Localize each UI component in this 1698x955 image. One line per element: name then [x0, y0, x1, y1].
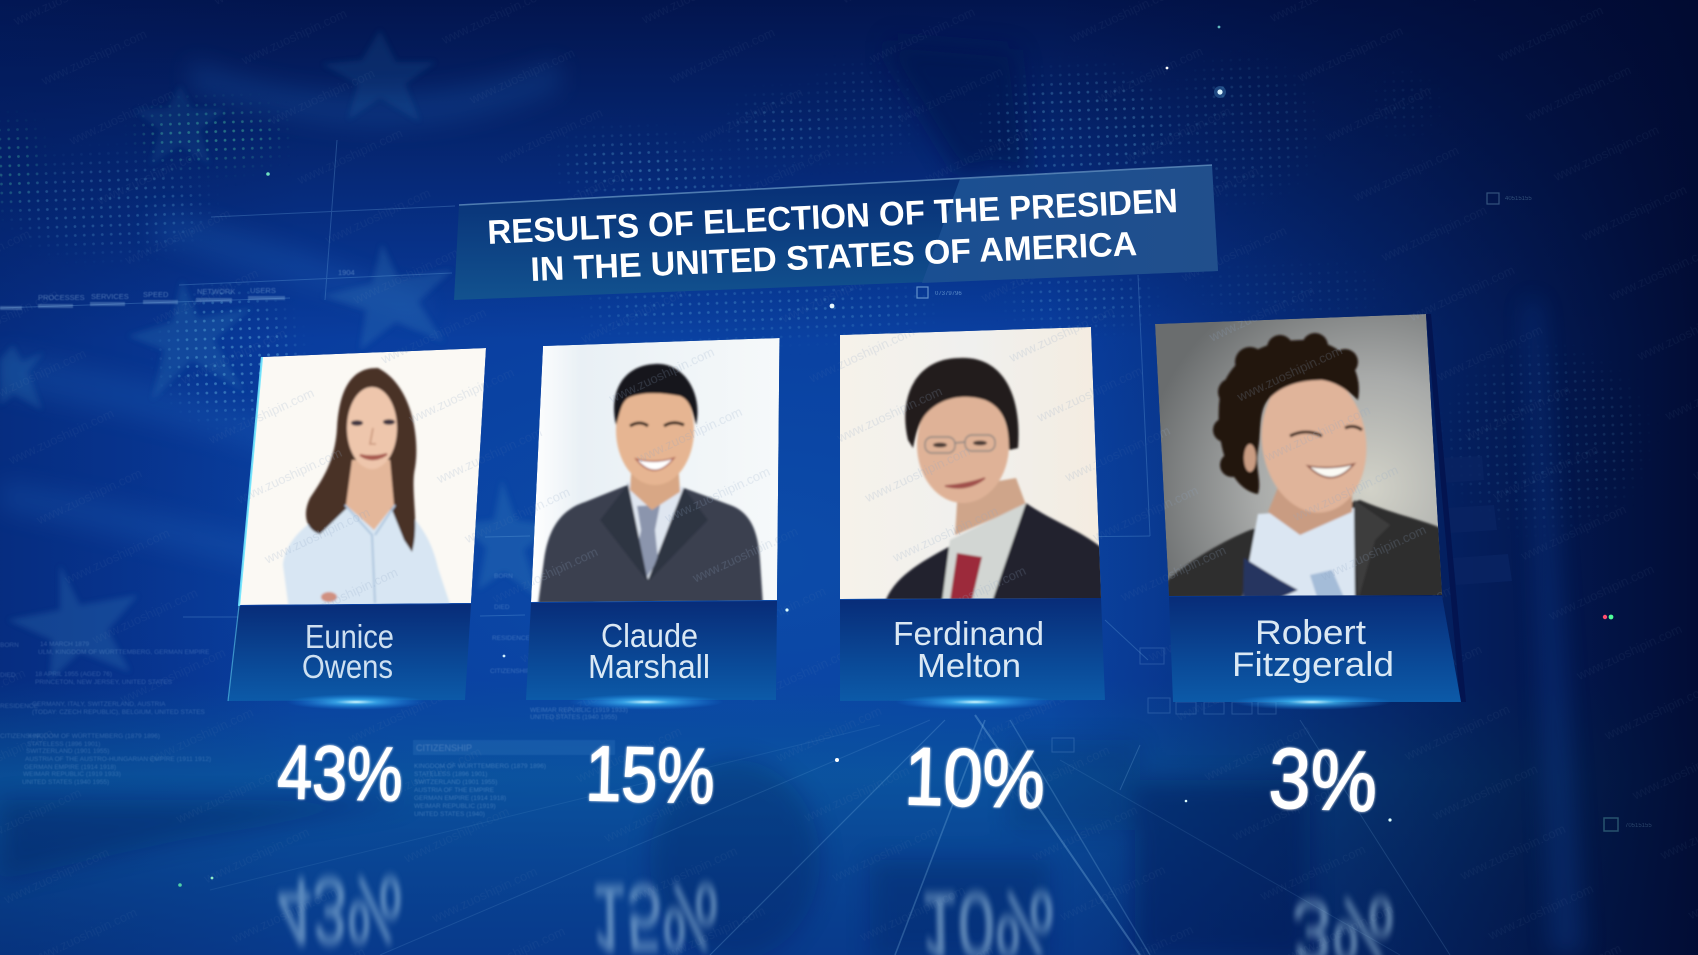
- name: Ferdinand Melton: [893, 615, 1044, 684]
- background biography text left: BORN: [0, 642, 19, 649]
- background interface labels: SPEED: [143, 290, 169, 299]
- title panel: [454, 165, 1218, 300]
- right dark flag stripes: [1440, 456, 1512, 585]
- small interface squares: 40515155: [1505, 196, 1532, 202]
- background interface labels: 1904: [338, 268, 355, 277]
- light rays: [210, 715, 1450, 955]
- background interface labels: SERVICES: [91, 292, 129, 301]
- flag wave bands: [0, 60, 560, 585]
- background biography text left: UNITED STATES (1940 1955): [22, 779, 109, 786]
- watermark on photos: [249, 314, 1442, 604]
- background biography text centre: CITIZENSHIP: [416, 743, 472, 753]
- background biography text centre: GERMAN EMPIRE (1914 1918): [414, 795, 506, 802]
- background interface labels: PROCESSES: [38, 293, 85, 302]
- card: Ferdinand Melton: [840, 327, 1105, 701]
- name panel: Ferdinand: [840, 598, 1105, 701]
- background biography text left: KINGDOM OF WÜRTTEMBERG (1879 1896): [28, 732, 160, 740]
- background biography text centre: KINGDOM OF WÜRTTEMBERG (1879 1896): [414, 762, 546, 770]
- background biography text left: RESIDENCE: [0, 703, 39, 710]
- name: Robert Fitzgerald: [1232, 614, 1394, 684]
- name: Claude Marshall: Marshall: [588, 648, 710, 685]
- background biography text centre: UNITED STATES (1940 1955): [530, 714, 617, 721]
- percentage reflections: [277, 858, 1397, 955]
- background biography text left: WEIMAR REPUBLIC (1919 1933): [23, 771, 121, 778]
- background biography text left: AUSTRIA OF THE AUSTRO-HUNGARIAN EMPIRE (1911 1912): [25, 756, 211, 763]
- background biography text centre: UNITED STATES (1940): [414, 811, 485, 818]
- background interface labels: USERS: [250, 286, 276, 295]
- photo: Claude: [531, 338, 780, 605]
- background biography text left: STATELESS (1896 1901): [27, 741, 100, 748]
- background biography text centre: SWITZERLAND (1901 1955): [414, 779, 497, 786]
- title text: IN THE UNITED STATES OF AMERICA: [530, 225, 1138, 289]
- background interface labels: [0, 268, 355, 310]
- name panel: Eunice: [228, 604, 471, 701]
- background biography text centre: [413, 573, 628, 818]
- name: Claude Marshall: [588, 617, 710, 685]
- grid lines: [0, 140, 1150, 660]
- dark map shapes: [0, 40, 1310, 955]
- background biography text left: 18 APRIL 1955 (AGED 76): [35, 671, 112, 678]
- small interface squares: 70515155: [1625, 823, 1652, 829]
- background biography text left: DIED: [0, 672, 16, 679]
- background biography text left: PRINCETON, NEW JERSEY, UNITED STATES: [35, 679, 173, 686]
- background biography text centre: WEIMAR REPUBLIC (1919): [414, 803, 496, 810]
- title text: [487, 182, 1179, 289]
- photo: Eunice: [239, 348, 486, 610]
- percentages: [277, 729, 1379, 830]
- name: Robert Fitzgerald: Fitzgerald: [1232, 646, 1394, 684]
- percentages: 10%: [903, 731, 1046, 826]
- background biography text left: GERMANY, ITALY, SWITZERLAND, AUSTRIA: [32, 701, 166, 708]
- small interface squares: [917, 193, 1652, 831]
- hair: [1213, 333, 1359, 494]
- name: Ferdinand Melton: Ferdinand: [893, 615, 1044, 652]
- background biography text left: CITIZENSHIP: [0, 733, 40, 740]
- name: Eunice Owens: Owens: [302, 648, 393, 685]
- name panel: Robert: [1169, 596, 1461, 702]
- name: Claude Marshall: Claude: [601, 617, 698, 654]
- background biography text centre: CITIZENSHIP: [490, 668, 530, 675]
- background biography text left: SWITZERLAND (1901 1955): [26, 748, 109, 755]
- background interface labels: NETWORK: [197, 287, 235, 296]
- name: Eunice Owens: [302, 618, 394, 685]
- name: Ferdinand Melton: Melton: [917, 647, 1021, 684]
- background biography text left: ULM, KINGDOM OF WÜRTTEMBERG, GERMAN EMPIRE: [38, 648, 210, 656]
- background biography text left: (TODAY: CZECH REPUBLIC), BELGIUM, UNITED STATES: [32, 709, 206, 716]
- name: Eunice Owens: Eunice: [305, 618, 394, 655]
- card edge shadow: [1426, 314, 1466, 702]
- background biography text left: 14 MARCH 1879: [40, 641, 90, 648]
- world map dots: [10, 66, 1642, 526]
- background biography text centre: AUSTRIA OF THE EMPIRE: [414, 787, 495, 794]
- glow lights under cards: [286, 694, 1392, 710]
- background biography text left: [0, 641, 211, 786]
- vertical light beam: [1525, 300, 1585, 955]
- percentages: 15%: [585, 729, 716, 820]
- small interface squares: 07379796: [935, 291, 962, 297]
- percentages: 3%: [1267, 730, 1379, 830]
- title panel lighter section: [922, 165, 1218, 283]
- background biography text centre: BORN: [494, 573, 513, 580]
- percentages: 43%: [277, 729, 403, 817]
- flag stars: [0, 30, 554, 680]
- name panel: Claude: [526, 601, 777, 700]
- photo: Robert: [1155, 314, 1445, 600]
- background biography text centre: RESIDENCE: [492, 635, 531, 642]
- small square boxes between cards: [1052, 648, 1276, 752]
- particles: [178, 26, 1613, 887]
- card: Eunice Owens: [228, 348, 486, 701]
- title text: RESULTS OF ELECTION OF THE PRESIDEN: [487, 182, 1179, 252]
- card: Robert Fitzgerald: [1155, 314, 1466, 702]
- background biography text centre: WEIMAR REPUBLIC (1919 1933): [530, 707, 628, 714]
- background biography text left: GERMAN EMPIRE (1914 1918): [24, 764, 116, 771]
- photo: Ferdinand: [840, 327, 1105, 602]
- background biography text centre: DIED: [494, 604, 510, 611]
- card: Claude Marshall: [526, 338, 780, 700]
- background biography text centre: STATELESS (1896 1901): [414, 771, 487, 778]
- name: Robert Fitzgerald: Robert: [1255, 614, 1367, 652]
